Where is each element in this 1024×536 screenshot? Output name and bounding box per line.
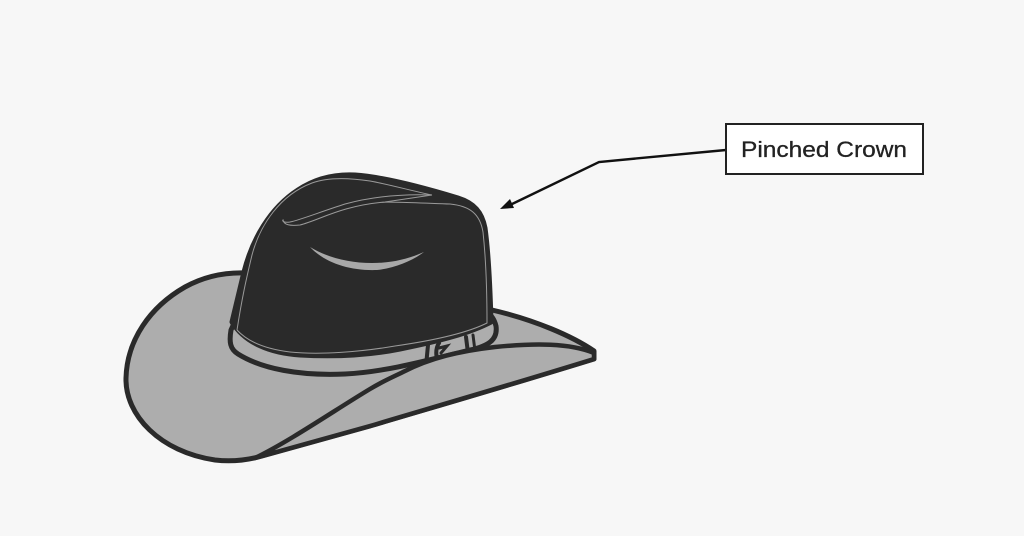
callout: Pinched Crown — [726, 124, 923, 174]
front brim fold — [255, 345, 594, 458]
icon: cowboy hat — [126, 175, 594, 461]
crown highlight crescent — [310, 247, 424, 270]
crown pinch crease — [283, 195, 432, 225]
crown inner outline — [237, 179, 487, 353]
hat brim — [126, 273, 594, 461]
hat band — [230, 310, 496, 374]
arrow: leader line to crown — [500, 150, 726, 209]
callout: Pinched Crown: Pinched Crown — [741, 137, 907, 162]
band buckle — [426, 335, 475, 366]
hat crown — [232, 175, 491, 356]
